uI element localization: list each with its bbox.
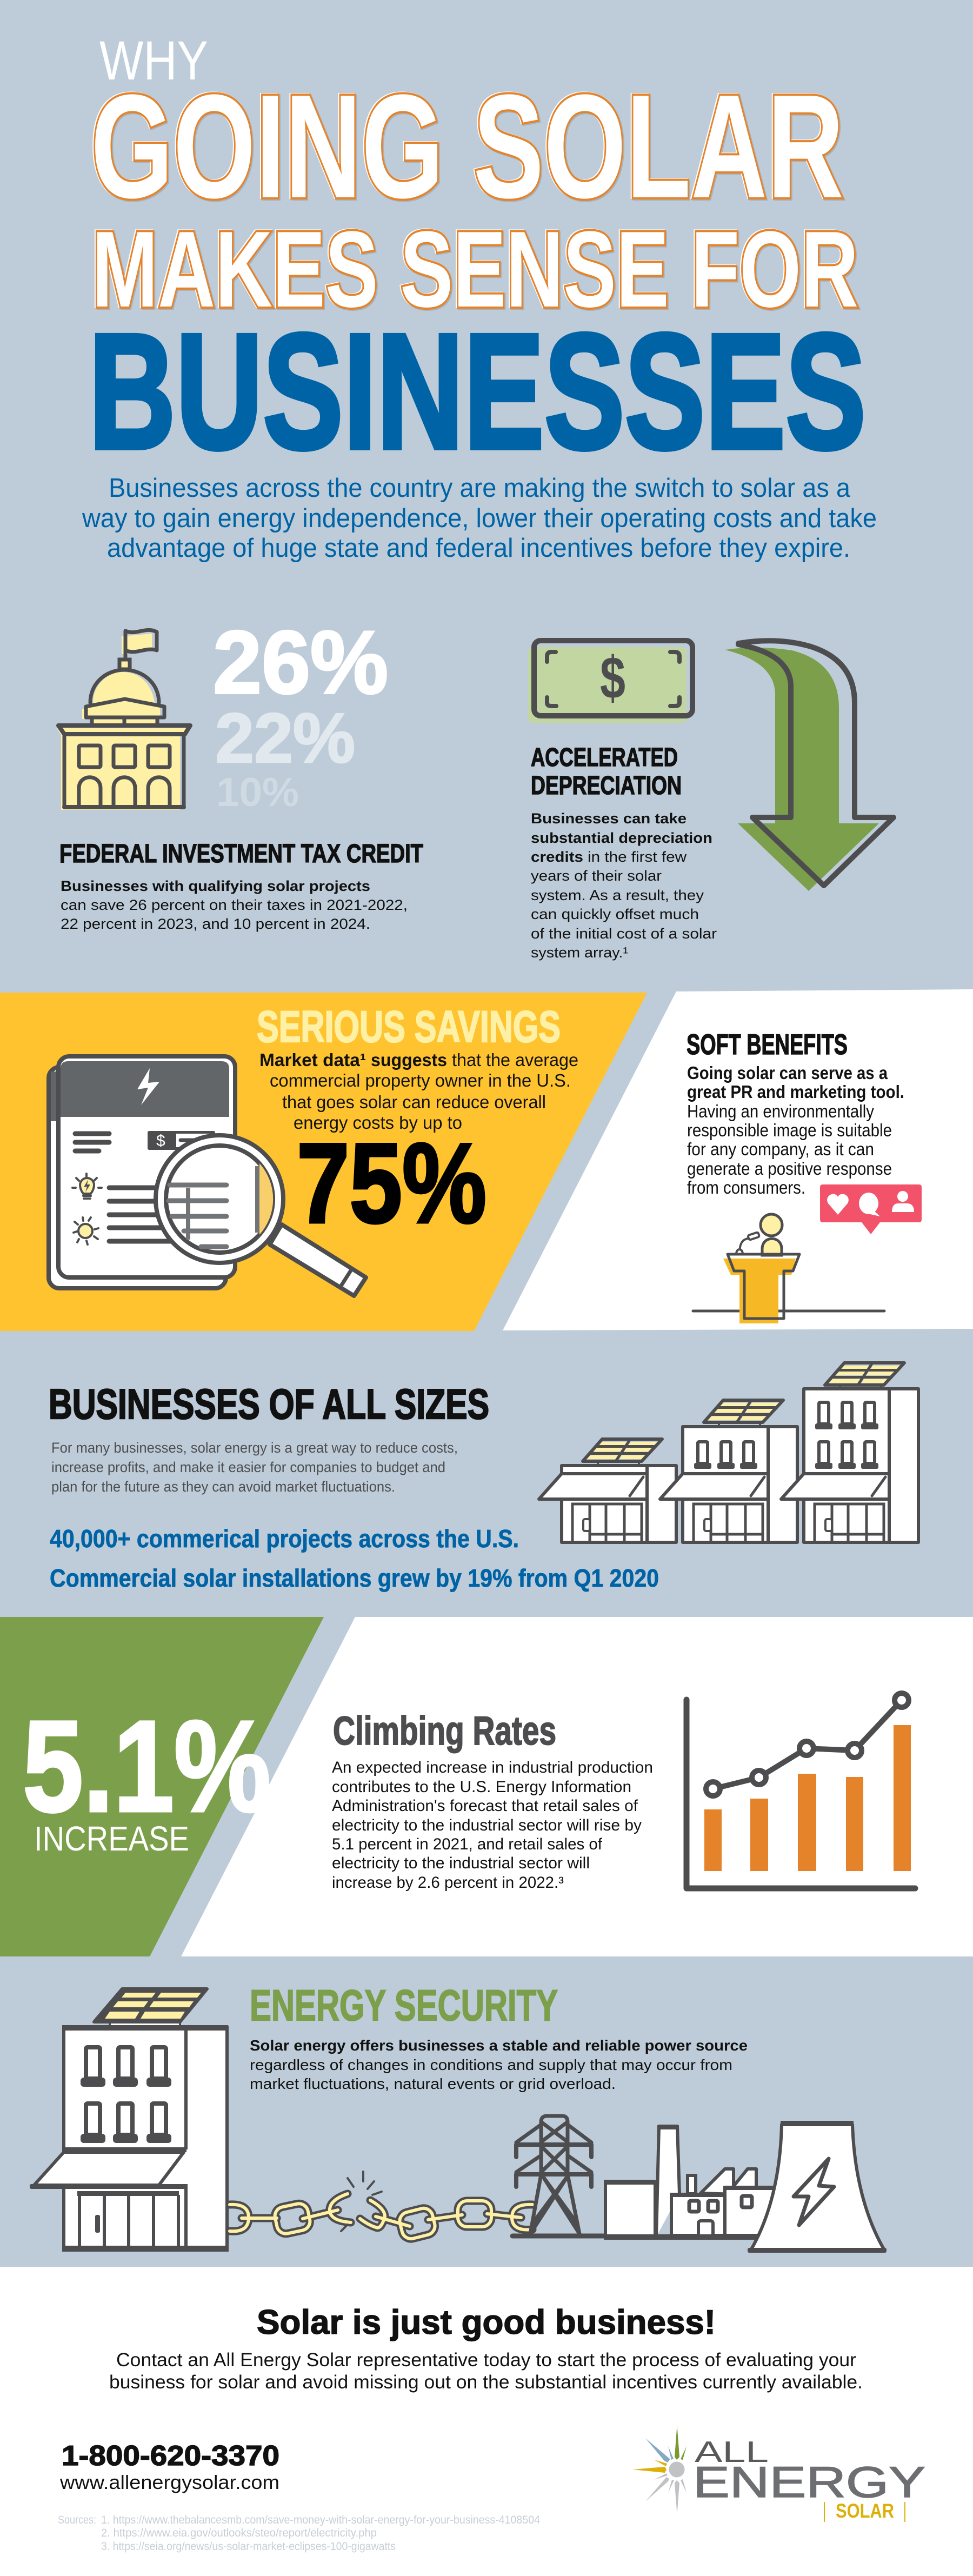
body text — [109, 2349, 863, 2393]
heading: Climbing Rates — [333, 1708, 556, 1753]
label: increase: INCREASE — [34, 1819, 189, 1858]
panel background — [0, 1617, 324, 1956]
icon: broken chain — [230, 2172, 532, 2241]
body text: credits — [531, 849, 583, 865]
panel: 5.1 percent increase — [0, 1617, 324, 1956]
sources — [58, 2514, 540, 2553]
icon: capitol building — [57, 630, 190, 810]
body text: Having an environmentally — [687, 1101, 874, 1121]
body text: increase by 2.6 percent in 2022.³ — [332, 1874, 564, 1892]
body text: An expected increase in industrial production — [332, 1759, 653, 1776]
body text: can save 26 percent on their taxes in 2021-2022, — [61, 897, 408, 913]
panel background — [503, 989, 973, 1330]
heading: FEDERAL INVESTMENT TAX CREDIT — [59, 840, 423, 868]
body text: can quickly offset much — [531, 906, 699, 922]
body text: energy costs by up to — [294, 1113, 462, 1133]
panel background — [181, 1617, 973, 1956]
icon: dollar bill — [528, 641, 692, 723]
body text: suggests — [371, 1050, 447, 1070]
logo: all energy solar: ENERGY — [693, 2458, 925, 2507]
body text: plan for the future as they can avoid market fluctuations. — [51, 1479, 395, 1495]
icon: factory — [604, 2125, 774, 2240]
body text: contributes to the U.S. Energy Information — [332, 1778, 631, 1796]
icon: three buildings with solar panels — [539, 1363, 918, 1542]
title line: why: WHY — [99, 30, 208, 91]
panel background — [0, 993, 647, 1331]
intro text: advantage of huge state and federal incentives before they expire. — [107, 534, 850, 563]
body text: from consumers. — [687, 1177, 805, 1197]
contact phone: 1-800-620-3370 — [62, 2440, 279, 2472]
heading: Solar is just good business! — [257, 2304, 716, 2341]
logo: all energy solar: SOLAR — [836, 2500, 894, 2522]
icon: document with magnifier: $ — [156, 1132, 165, 1150]
icon: down arrow — [725, 641, 894, 891]
icon: social reactions bubble — [820, 1184, 922, 1234]
body text: increase profits, and make it easier for companies to budget and — [51, 1459, 445, 1475]
heading: SOFT BENEFITS — [687, 1029, 848, 1061]
panel: accelerated depreciation — [528, 641, 894, 961]
logo: all energy solar — [632, 2425, 925, 2522]
body text: generate a positive response — [687, 1159, 892, 1179]
panel background — [0, 2267, 973, 2576]
heading: DEPRECIATION — [531, 771, 682, 800]
body text: that the average — [452, 1050, 578, 1070]
sources: 2. https://www.eia.gov/outlooks/steo/report/electricity.php — [101, 2527, 377, 2539]
body text — [61, 878, 408, 932]
body text: great PR and marketing tool. — [687, 1082, 904, 1102]
icon: document with magnifier — [49, 1056, 366, 1296]
panel: call to action footer — [0, 2267, 973, 2576]
body text: in the first few — [588, 849, 687, 865]
title — [89, 30, 866, 483]
intro text: way to gain energy independence, lower their operating costs and take — [82, 504, 877, 533]
body text: Market data¹ — [259, 1050, 366, 1070]
icon: speaker at podium — [693, 1214, 884, 1323]
icon: transmission tower — [512, 2116, 605, 2236]
stat lines: Commercial solar installations grew by 19% from Q1 2020 — [50, 1564, 659, 1592]
body text: responsible image is suitable — [687, 1120, 892, 1140]
heading: ENERGY SECURITY — [250, 1981, 558, 2030]
body text: Going solar can serve as a — [687, 1063, 888, 1083]
stat lines — [50, 1525, 659, 1592]
body text: that goes solar can reduce overall — [282, 1092, 546, 1112]
stat: 75 percent: 75% — [297, 1120, 486, 1247]
logo wordmark: ALL — [695, 2435, 769, 2468]
body text — [687, 1063, 904, 1197]
body text — [531, 810, 717, 961]
body text: regardless of changes in conditions and supply that may occur from — [250, 2056, 732, 2073]
sources: 1. https://www.thebalancesmb.com/save-money-with-solar-energy-for-your-business-4108504 — [101, 2514, 540, 2526]
body text — [51, 1440, 458, 1495]
body text — [259, 1050, 578, 1133]
panel: climbing rates — [181, 1617, 973, 1956]
panel: federal investment tax credit — [57, 613, 423, 932]
sources: 3. https://seia.org/news/us-solar-market-eclipses-100-gigawatts — [101, 2540, 396, 2553]
body text: electricity to the industrial sector will rise by — [332, 1816, 642, 1834]
body text: market fluctuations, natural events or grid overload. — [250, 2075, 616, 2092]
body text: 22 percent in 2023, and 10 percent in 2024. — [61, 916, 370, 932]
panel: energy security — [30, 1981, 887, 2253]
heading — [531, 743, 682, 800]
body text: for any company, as it can — [687, 1139, 874, 1159]
icon: building with solar panel — [30, 1989, 228, 2251]
body text: Businesses with qualifying solar projects — [61, 878, 370, 894]
body text — [250, 2037, 748, 2092]
body text: For many businesses, solar energy is a great way to reduce costs, — [51, 1440, 458, 1456]
stat: 22 percent: 22% — [215, 698, 355, 777]
heading: SERIOUS SAVINGS — [257, 1002, 561, 1051]
body text: Businesses can take — [531, 810, 687, 827]
stat: 5.1 percent: 5.1% — [23, 1694, 271, 1839]
intro text — [82, 474, 877, 563]
sources: Sources: — [58, 2514, 96, 2526]
body text: system array.¹ — [531, 944, 628, 961]
body text: electricity to the industrial sector will — [332, 1854, 590, 1872]
body text: Administration's forecast that retail sales of — [332, 1797, 638, 1815]
chart: bars and line — [687, 1693, 915, 1888]
body text: system. As a result, they — [531, 887, 704, 903]
contact website: www.allenergysolar.com — [59, 2471, 279, 2493]
icon: dollar bill: $ — [600, 645, 625, 711]
body text: business for solar and avoid missing out on the substantial incentives currently available. — [109, 2372, 863, 2393]
intro text: Businesses across the country are making the switch to solar as a — [109, 474, 851, 503]
stat: 26 percent: 26% — [213, 613, 388, 712]
body text — [332, 1759, 653, 1892]
body text: of the initial cost of a solar — [531, 926, 717, 942]
stat block: 5.1 percent increase — [23, 1694, 271, 1858]
body text: 5.1 percent in 2021, and retail sales of — [332, 1835, 603, 1853]
body text: Contact an All Energy Solar representative today to start the process of evaluating your — [116, 2349, 856, 2371]
icon: cooling tower with lightning bolt — [748, 2121, 887, 2253]
panel: serious savings — [0, 993, 647, 1331]
body text: Solar energy offers businesses a stable and reliable power source — [250, 2037, 748, 2054]
body text: years of their solar — [531, 868, 662, 884]
heading: BUSINESSES OF ALL SIZES — [49, 1380, 489, 1428]
body text: substantial depreciation — [531, 830, 712, 846]
logo star — [632, 2425, 687, 2514]
panel: businesses of all sizes — [49, 1363, 918, 1592]
stat: 10 percent: 10% — [216, 769, 299, 815]
panel: soft benefits — [503, 989, 973, 1330]
body text: commercial property owner in the U.S. — [270, 1070, 571, 1090]
heading: ACCELERATED — [531, 743, 678, 772]
stat lines: 40,000+ commerical projects across the U.S. — [50, 1525, 519, 1553]
